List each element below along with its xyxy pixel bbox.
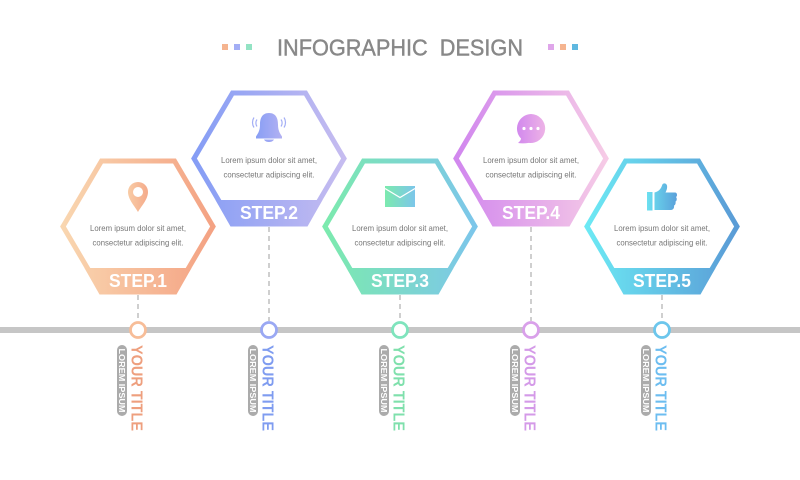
timeline marker 3 bbox=[392, 322, 408, 338]
panel: step 2 hexagon bbox=[194, 93, 344, 226]
icon: map pin bbox=[128, 182, 148, 212]
step 2 text: consectetur adipiscing elit. bbox=[224, 170, 314, 180]
step 2 banner bbox=[216, 200, 322, 226]
icon: speech bubble bbox=[517, 114, 545, 143]
decorative squares left bbox=[222, 44, 252, 50]
step 4 text: Lorem ipsum dolor sit amet, bbox=[483, 155, 579, 165]
label group 2: LOREM IPSUM bbox=[248, 348, 257, 413]
label group 3: LOREM IPSUM bbox=[379, 348, 388, 413]
connector: step 1 bbox=[137, 295, 139, 321]
step 1 label: STEP.1 bbox=[109, 270, 167, 291]
step 1 text: Lorem ipsum dolor sit amet, bbox=[90, 223, 186, 233]
step 2 text bbox=[221, 155, 317, 180]
step 5 text bbox=[614, 223, 710, 248]
connector: step 3 bbox=[399, 295, 401, 321]
label group 1: YOUR TITLE bbox=[128, 345, 144, 431]
step 5 label: STEP.5 bbox=[633, 270, 691, 291]
label group 1 bbox=[117, 345, 144, 431]
icon: envelope bbox=[385, 186, 415, 207]
label group 4 bbox=[510, 345, 538, 431]
timeline marker 2 bbox=[262, 322, 276, 338]
step 3 label: STEP.3 bbox=[371, 270, 429, 291]
label group 2 bbox=[248, 345, 276, 431]
step 4 label: STEP.4 bbox=[502, 202, 561, 223]
step 1 banner bbox=[84, 268, 192, 294]
step 1 text: consectetur adipiscing elit. bbox=[92, 238, 184, 248]
step 3 text: consectetur adipiscing elit. bbox=[354, 238, 446, 248]
step 1 text bbox=[90, 223, 186, 248]
connector: step 2 bbox=[268, 227, 270, 321]
label group 4: LOREM IPSUM bbox=[510, 348, 519, 413]
connector: step 5 bbox=[661, 295, 663, 321]
timeline marker 4 bbox=[524, 322, 538, 338]
timeline bar bbox=[0, 327, 800, 333]
decorative squares right bbox=[548, 44, 578, 50]
label group 1: LOREM IPSUM bbox=[117, 348, 126, 413]
step 3 banner bbox=[346, 268, 454, 294]
step 2 label: STEP.2 bbox=[240, 202, 298, 223]
label group 2: YOUR TITLE bbox=[258, 345, 276, 431]
panel: step 4 hexagon bbox=[456, 93, 606, 226]
timeline marker 5 bbox=[654, 322, 670, 338]
label group 3 bbox=[379, 345, 406, 431]
panel: step 5 hexagon bbox=[587, 161, 737, 294]
label group 3: YOUR TITLE bbox=[390, 345, 406, 431]
connector: step 4 bbox=[530, 227, 532, 321]
step 4 text bbox=[483, 155, 579, 180]
icon: bell bbox=[252, 113, 286, 142]
step 5 text: Lorem ipsum dolor sit amet, bbox=[614, 223, 710, 233]
label group 5 bbox=[641, 345, 668, 431]
step 3 text: Lorem ipsum dolor sit amet, bbox=[352, 223, 448, 233]
step 4 banner bbox=[478, 200, 584, 226]
timeline marker 1 bbox=[130, 322, 146, 338]
step 5 banner bbox=[608, 268, 716, 294]
step 2 text: Lorem ipsum dolor sit amet, bbox=[221, 155, 317, 165]
panel: step 3 hexagon bbox=[325, 161, 475, 294]
label group 5: YOUR TITLE bbox=[652, 345, 668, 431]
step 5 text: consectetur adipiscing elit. bbox=[616, 238, 708, 248]
icon: thumbs up bbox=[647, 183, 677, 210]
step 3 text bbox=[352, 223, 448, 248]
panel: step 1 hexagon bbox=[63, 161, 213, 294]
label group 4: YOUR TITLE bbox=[520, 345, 538, 431]
label group 5: LOREM IPSUM bbox=[641, 348, 650, 413]
title: INFOGRAPHIC DESIGN bbox=[277, 34, 523, 60]
step 4 text: consectetur adipiscing elit. bbox=[486, 170, 576, 180]
